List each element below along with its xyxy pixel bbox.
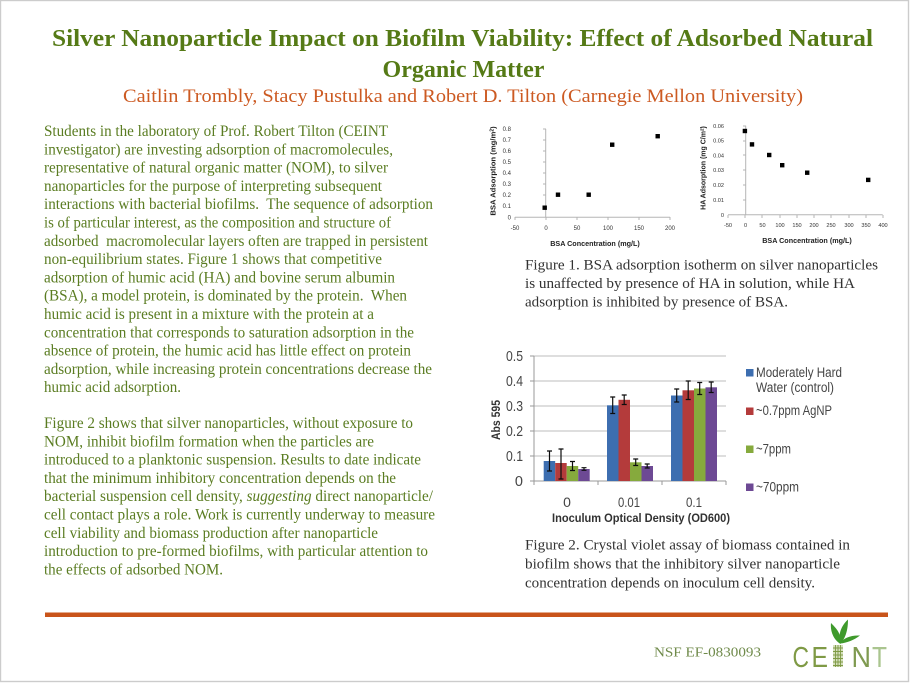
text block: second paragraph [44,415,435,578]
caption: figure 2 [525,536,850,592]
caption: figure 1: is unaffected by presence of HA in solution, while HA [525,275,855,292]
bars: OD 0 [544,461,590,481]
chart: HA adsorption scatter plot: 0.05 [713,139,724,145]
text block: first paragraph: concentration that corresponds to saturation adsorption in the [44,324,414,341]
legend: Water (control) [756,380,834,395]
chart: biofilm biomass bar chart: 0.5 [506,349,523,365]
chart: HA adsorption scatter plot: 0.01 [713,198,724,204]
legend: ~70ppm [756,480,799,494]
chart: HA adsorption scatter plot: ) [700,126,708,128]
text block: first paragraph: investigator) are investing adsorption of macromolecules, [44,141,393,158]
text block: first paragraph: nanoparticles for the purpose of interpreting subsequent [44,178,383,195]
chart: BSA adsorption scatter plot: 0.7 [503,138,512,144]
chart: BSA adsorption scatter plot: 0.2 [503,193,512,199]
title [52,26,873,83]
text block: first paragraph: (BSA), a model protein, is dominated by the protein. When [44,288,407,305]
logo: CEINT [792,620,887,674]
text block: second paragraph: NOM, inhibit biofilm formation when the particles are [44,433,374,450]
chart: HA adsorption scatter plot: 0.02 [713,183,724,189]
logo letters N and T: T [872,642,887,674]
caption: figure 2: concentration depends on inoculum cell density. [525,574,815,592]
text block: first paragraph: adsorbed macromolecular layers often are trapped in persistent [44,233,429,250]
chart: HA adsorption scatter plot: 0 [721,213,724,219]
chart: biofilm biomass bar chart: Inoculum Optical Density (OD600) [552,511,730,525]
legend [746,365,842,494]
chart: BSA adsorption scatter plot: 0.6 [503,149,512,155]
chart: biofilm biomass bar chart: 0.2 [506,424,523,440]
chart: BSA adsorption scatter plot: 150 [634,226,645,232]
chart: BSA adsorption scatter plot: 200 [665,226,676,232]
chart: HA adsorption scatter plot: HA Adsorption (mg C/m [700,131,708,210]
caption: figure 1: adsorption is inhibited by presence of BSA. [525,294,788,310]
logo letters C and E: E [812,642,828,674]
chart: HA adsorption scatter plot: 400 [878,223,888,229]
chart: HA adsorption scatter plot: 0.06 [713,124,724,130]
chart: HA adsorption scatter plot: 2 [700,128,704,131]
chart: BSA adsorption scatter plot: 50 [574,226,581,232]
text block: first paragraph: representative of natural organic matter (NOM), to silver [44,160,388,177]
bars: OD 0.01 [607,400,653,481]
text block: second paragraph: cell contact plays a role. Work is currently underway to measure [44,506,435,524]
chart: HA adsorption scatter plot: 150 [792,223,802,229]
chart: HA adsorption scatter plot: 100 [775,223,785,229]
chart: biofilm biomass bar chart: 0.1 [686,494,702,510]
icon: bamboo leaves [831,620,860,644]
caption: figure 2: biofilm shows that the inhibitory silver nanoparticle [525,556,840,572]
icon: bamboo stalk [833,645,843,667]
logo letters N and T [852,642,887,674]
text block: second paragraph: introduced to a planktonic suspension. Results to date indicate [44,452,421,469]
text block: first paragraph: Students in the laboratory of Prof. Robert Tilton (CEINT [44,123,389,140]
chart: BSA adsorption scatter plot: 0.5 [503,160,512,166]
chart: biofilm biomass bar chart: 0.3 [506,399,523,415]
chart: BSA adsorption scatter plot: BSA Concentration (mg/L) [550,239,640,248]
chart: HA adsorption scatter plot: -50 [724,223,732,229]
chart: BSA adsorption scatter plot: 0 [544,226,548,232]
chart: HA adsorption scatter plot: 350 [861,223,871,229]
text block: first paragraph: adsorption, while increasing protein concentrations decrease the [44,361,432,378]
caption: figure 1: Figure 1. BSA adsorption isotherm on silver nanoparticles [525,256,878,274]
chart: BSA adsorption scatter plot: -50 [511,226,520,232]
chart: HA adsorption scatter plot: 250 [826,223,836,229]
chart: HA adsorption scatter plot [700,124,888,245]
chart: BSA adsorption scatter plot: 0.4 [503,171,512,177]
text block: first paragraph: humic acid adsorption. [44,379,181,396]
logo letters C and E: C [792,642,809,674]
text block: second paragraph: introduction to pre-formed biofilms, with particular attention to [44,543,428,560]
text block: second paragraph: the effects of adsorbed NOM. [44,561,223,578]
divider bar [45,612,888,617]
legend: ~7ppm [756,442,791,456]
chart: biofilm biomass bar chart: 0.4 [506,374,523,390]
text block: second paragraph: bacterial suspension cell density, suggesting direct nanoparticle/ [44,488,434,505]
bars: OD 0.1 [671,387,717,481]
text block: first paragraph: non-equilibrium states. Figure 1 shows that competitive [44,251,382,268]
grant number: NSF EF-0830093 [654,646,761,660]
chart: HA adsorption scatter plot: 0 [744,223,747,229]
legend: ~0.7ppm AgNP [756,403,832,418]
chart: BSA adsorption scatter plot: ) [488,126,498,129]
chart: HA adsorption scatter plot: BSA Concentration (mg/L) [762,236,852,245]
chart: HA adsorption scatter plot: 0.04 [713,154,724,160]
chart: biofilm biomass bar chart: 0.01 [618,494,640,510]
chart: biofilm biomass bar chart: 0 [563,494,571,510]
chart: BSA adsorption scatter plot: BSA Adsorption (mg/m [488,132,498,216]
text block: first paragraph: adsorption of humic acid (HA) and bovine serum albumin [44,269,395,286]
error bars [547,381,714,479]
text block: first paragraph [44,123,433,396]
chart: BSA adsorption scatter plot: 0 [508,216,512,222]
chart: HA adsorption scatter plot: 300 [844,223,854,229]
chart: HA adsorption scatter plot: 200 [809,223,819,229]
chart: biofilm biomass bar chart: 0 [515,474,523,490]
title: Organic Matter [383,57,545,83]
text block: first paragraph: humic acid is present in a mixture with the protein at a [44,306,374,323]
logo letters N and T: N [852,642,871,674]
chart: HA adsorption scatter plot: 50 [759,223,766,229]
chart: HA adsorption scatter plot: 0.03 [713,168,724,174]
caption: figure 2: Figure 2. Crystal violet assay of biomass contained in [525,536,850,554]
chart: BSA adsorption scatter plot: 2 [490,129,496,132]
logo letters C and E [792,642,828,674]
chart: BSA adsorption scatter plot: 0.1 [503,204,512,210]
chart: biofilm biomass bar chart [489,349,842,525]
chart: biofilm biomass bar chart: Abs 595 [489,400,503,440]
text block: first paragraph: absence of protein, the humic acid has little effect on protein [44,343,411,360]
text block: first paragraph: interactions with bacterial biofilms. The sequence of adsorption [44,196,433,213]
title: Silver Nanoparticle Impact on Biofilm Viability: Effect of Adsorbed Natural [52,26,873,52]
text block: second paragraph: cell viability and biomass production after nanoparticle [44,525,378,542]
text block: first paragraph: is of particular interest, as the composition and structure of [44,214,392,232]
legend: Moderately Hard [756,365,842,380]
chart: BSA adsorption scatter plot: 0.3 [503,182,512,188]
caption: figure 1 [525,256,878,310]
text block: second paragraph: that the minimum inhibitory concentration depends on the [44,470,396,487]
authors: Caitlin Trombly, Stacy Pustulka and Robert D. Tilton (Carnegie Mellon University) [123,87,803,107]
chart: BSA adsorption scatter plot: 100 [603,226,614,232]
chart: BSA adsorption scatter plot [488,126,676,248]
text block: second paragraph: Figure 2 shows that silver nanoparticles, without exposure to [44,415,413,432]
chart: biofilm biomass bar chart: 0.1 [506,449,523,465]
chart: BSA adsorption scatter plot: 0.8 [503,127,512,133]
